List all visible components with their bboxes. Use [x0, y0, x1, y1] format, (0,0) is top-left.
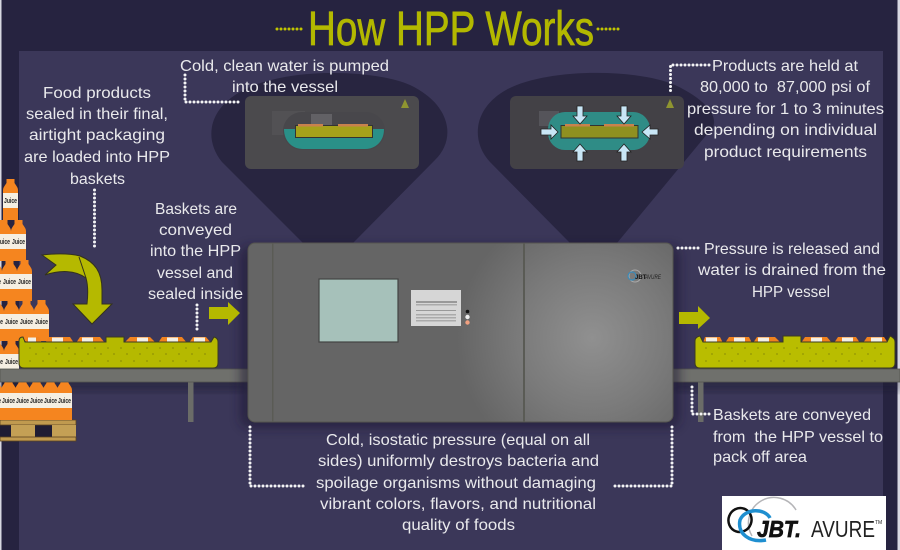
text: loading step: Food products: [43, 85, 151, 102]
text: release step: [697, 241, 886, 301]
spotlight cone right: [478, 73, 714, 243]
stack of juice bottles: Juice: [18, 279, 31, 286]
indicator lights: [465, 310, 470, 325]
right basket: [695, 336, 895, 368]
text: water step: into the vessel: [232, 79, 338, 96]
dotted leader lines: [94, 65, 710, 486]
machine logo: [628, 270, 662, 282]
stack of juice bottles: Juice: [16, 398, 29, 405]
stack of juice bottles: Juice: [4, 198, 17, 205]
text: conveying step: conveyed: [159, 222, 232, 239]
stack of juice bottles: Juice: [35, 319, 48, 326]
pressure arrows: [541, 106, 658, 161]
text: pack off step: Baskets are conveyed: [713, 407, 871, 424]
text: isostatic pressure explanation: [316, 432, 599, 534]
text: pressure step: 80,000 to 87,000 psi of: [700, 79, 871, 96]
stack of juice bottles: Juice: [3, 279, 16, 286]
text: isostatic pressure explanation: quality of foods: [402, 517, 515, 534]
logo: JBT Avure: TM: [875, 520, 882, 526]
conveyor right: [673, 375, 900, 422]
text: water step: Cold, clean water is pumped: [180, 58, 389, 75]
left basket: [19, 337, 218, 368]
text: isostatic pressure explanation: Cold, isostatic pressure (equal on all: [326, 432, 590, 449]
text: water step: [180, 58, 389, 96]
text: conveying step: vessel and: [157, 265, 233, 282]
text: release step: Pressure is released and: [704, 241, 880, 258]
stack of juice bottles: Juice: [44, 398, 57, 405]
stack of juice bottles: Juice: [20, 319, 33, 326]
text: pack off step: from the HPP vessel to: [713, 429, 883, 446]
text: pressure step: pressure for 1 to 3 minutes: [687, 101, 884, 118]
stack of juice bottles: Juice: [2, 398, 15, 405]
logo: JBT Avure: JBT.: [757, 516, 801, 542]
control panel: [411, 290, 461, 326]
text: pack off step: pack off area: [713, 449, 807, 466]
stack of juice bottles: Juice: [58, 398, 71, 405]
text: conveying step: sealed inside: [148, 286, 243, 303]
text: pressure step: Products are held at: [712, 58, 859, 75]
logo: JBT Avure: AVURE: [811, 516, 875, 542]
text: release step: HPP vessel: [752, 284, 830, 301]
text: pressure step: product requirements: [704, 144, 867, 161]
text: conveying step: into the HPP: [150, 243, 241, 260]
logo: JBT Avure: [722, 496, 886, 550]
text: loading step: airtight packaging: [29, 127, 165, 144]
stack of juice bottles: Juice: [30, 398, 43, 405]
text: loading step: sealed in their final,: [26, 106, 168, 123]
machine logo: AVURE: [644, 275, 662, 281]
stack of juice bottles: [0, 179, 72, 420]
text: pack off step: [713, 407, 883, 466]
machine logo: JBT: [635, 275, 647, 281]
text: pressure step: depending on individual: [694, 122, 877, 139]
text: conveying step: Baskets are: [155, 201, 237, 218]
stack of juice bottles: Juice: [5, 359, 18, 366]
text: isostatic pressure explanation: sides) uniformly destroys bacteria and: [318, 453, 599, 470]
title: How HPP Works: [308, 3, 594, 56]
conveyor left: [0, 375, 248, 422]
text: loading step: baskets: [70, 171, 125, 188]
text: isostatic pressure explanation: spoilage organisms without damaging: [316, 475, 596, 492]
pallet: [0, 420, 76, 441]
inset: water filling the vessel: [245, 96, 419, 169]
arrow into vessel: [209, 302, 240, 325]
spotlight cone left: [211, 73, 447, 243]
curved arrow into basket: [42, 254, 112, 324]
conveyor belts: [0, 369, 900, 382]
machine screen: [319, 279, 398, 342]
inset: pressure applied to the vessel: [510, 96, 684, 169]
arrow out of vessel: [679, 306, 710, 329]
stack of juice bottles: Juice: [5, 319, 18, 326]
text: release step: water is drained from the: [697, 262, 886, 279]
text: pressure step: [687, 58, 884, 161]
text: loading step: are loaded into HPP: [24, 149, 170, 166]
HPP machine: [240, 243, 680, 428]
text: isostatic pressure explanation: vibrant colors, flavors, and nutritional: [320, 496, 596, 513]
text: conveying step: [148, 201, 243, 303]
stack of juice bottles: Juice: [12, 239, 25, 246]
text: loading step: [24, 85, 170, 188]
